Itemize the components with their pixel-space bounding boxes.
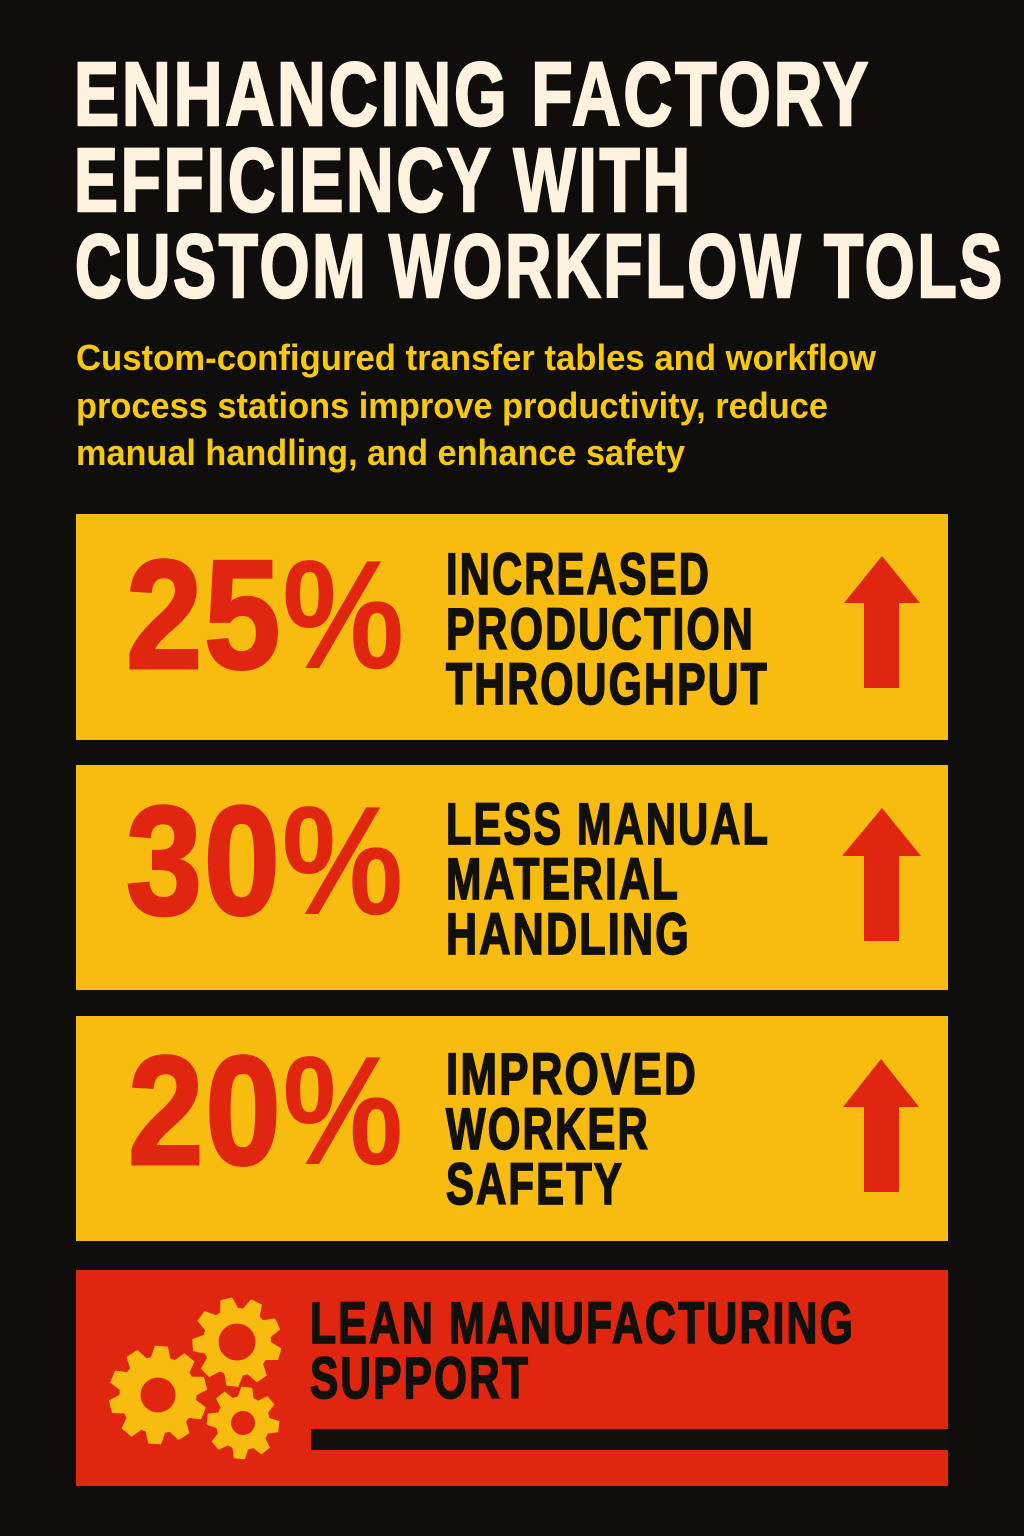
subtitle: process stations improve productivity, reduce [76, 385, 828, 426]
panel: 30% less manual material handling [76, 765, 948, 990]
label: less manual material handling: HANDLING [446, 902, 691, 967]
icon: up arrow [843, 1059, 919, 1192]
panel: 25% increased production throughput [76, 514, 948, 740]
stat: 25%: 25% [126, 528, 406, 701]
label: increased production throughput: INCREASED [446, 542, 711, 607]
label: less manual material handling: LESS MANUAL [446, 792, 770, 857]
label: improved worker safety [446, 1042, 698, 1217]
label: increased production throughput [446, 542, 769, 717]
label: increased production throughput: PRODUCTION [446, 597, 755, 662]
icon: up arrow [842, 808, 921, 941]
label: improved worker safety: WORKER [446, 1097, 650, 1162]
subtitle: Custom-configured transfer tables and workflow [76, 337, 877, 378]
panel: lean manufacturing support [76, 1270, 948, 1486]
label: less manual material handling [446, 792, 770, 967]
icon: gears [108, 1297, 282, 1460]
panel: 20% improved worker safety [76, 1016, 948, 1241]
black bar [311, 1429, 948, 1450]
label: lean manufacturing support [310, 1291, 855, 1411]
icon: up arrow [844, 556, 920, 688]
stat: 30%: 30% [126, 774, 405, 947]
label: increased production throughput: THROUGHPUT [446, 652, 769, 717]
label: less manual material handling: MATERIAL [446, 847, 680, 912]
label: lean manufacturing support: SUPPORT [310, 1346, 530, 1411]
label: improved worker safety: IMPROVED [446, 1042, 698, 1107]
title [74, 45, 1005, 317]
subtitle [76, 337, 877, 473]
stat: 20%: 20% [128, 1024, 405, 1197]
title: EFFICIENCY WITH [74, 131, 693, 231]
label: improved worker safety: SAFETY [446, 1152, 624, 1217]
subtitle: manual handling, and enhance safety [76, 432, 685, 473]
